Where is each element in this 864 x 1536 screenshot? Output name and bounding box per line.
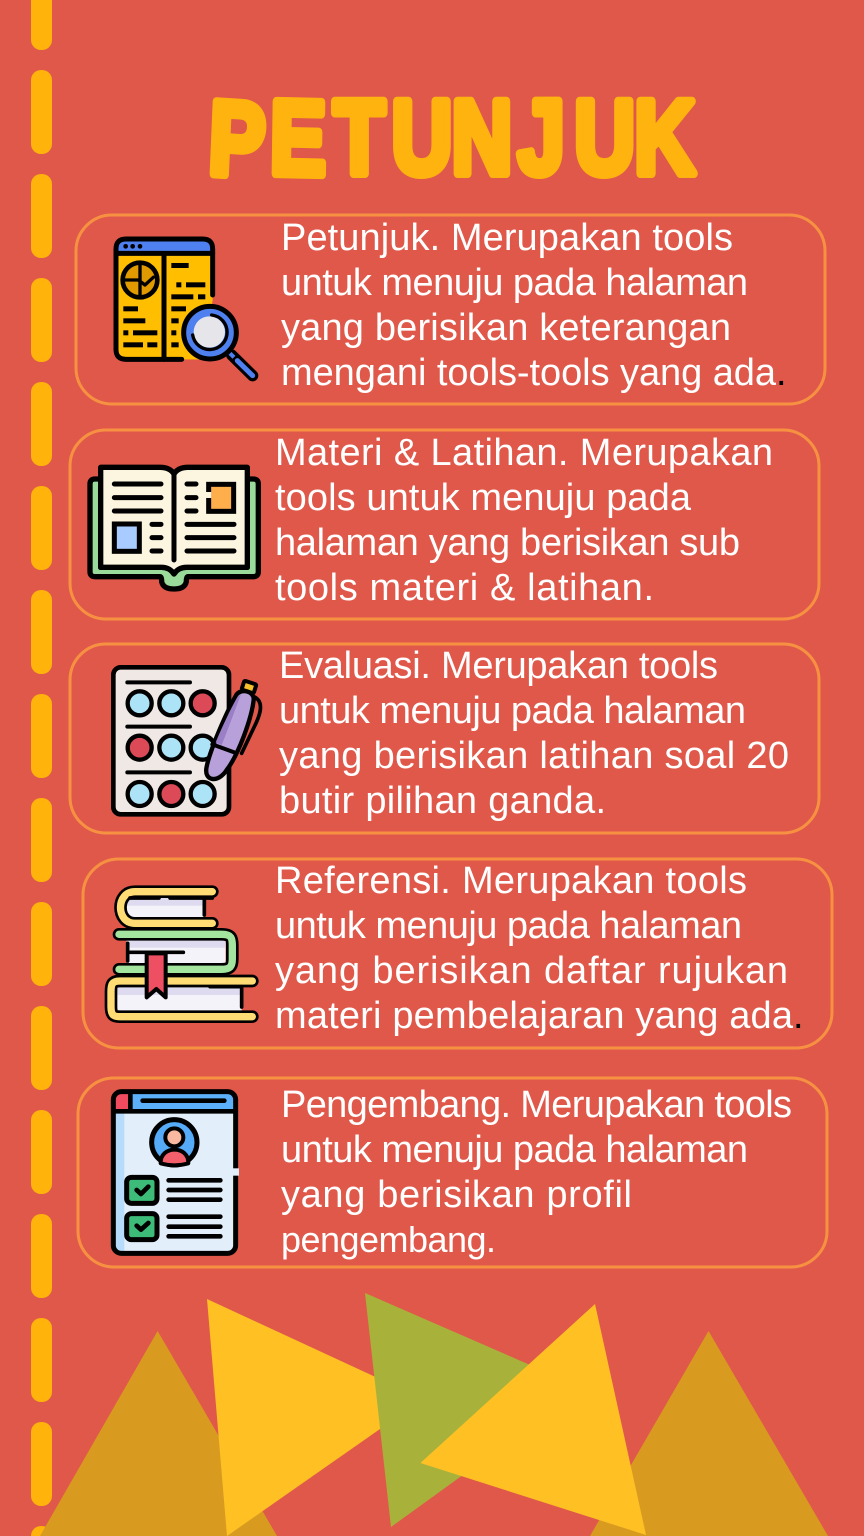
title: PETUNJUK xyxy=(207,80,695,200)
text: Pengembang description: pengembang. xyxy=(281,1219,496,1260)
text: Pengembang description: untuk menuju pada halaman xyxy=(281,1129,748,1171)
icon: stack of books xyxy=(111,892,252,1017)
text: Petunjuk description: Petunjuk. Merupakan tools xyxy=(281,217,733,259)
panel: Referensi xyxy=(83,859,832,1048)
panel: Evaluasi xyxy=(70,644,819,833)
panel border xyxy=(70,430,819,619)
icon: document with magnifying glass xyxy=(116,239,253,376)
panel border xyxy=(70,644,819,833)
panel border xyxy=(78,1078,827,1267)
text: Petunjuk description: yang berisikan keterangan xyxy=(281,307,731,349)
text: Petunjuk description: . xyxy=(776,352,787,394)
icon: open book xyxy=(90,467,258,589)
text: Petunjuk description xyxy=(281,217,787,394)
text: Referensi description: yang berisikan daftar rujukan xyxy=(275,950,788,992)
text: Evaluasi description: untuk menuju pada halaman xyxy=(279,690,746,732)
text: Materi & Latihan description: tools untuk menuju pada xyxy=(275,477,692,519)
text: Referensi description: Referensi. Merupakan tools xyxy=(275,860,747,902)
text: Evaluasi description: butir pilihan ganda. xyxy=(279,780,606,822)
text: Pengembang description: yang berisikan profil xyxy=(281,1174,632,1216)
text: Referensi description: materi pembelajaran yang ada xyxy=(275,995,794,1037)
text: Petunjuk description: mengani tools-tools yang ada xyxy=(281,352,777,394)
text: Referensi description xyxy=(275,860,804,1037)
panel: Pengembang xyxy=(78,1078,827,1267)
text: Petunjuk description: untuk menuju pada halaman xyxy=(281,262,748,304)
dashed vertical line xyxy=(31,0,52,1536)
panel: Materi & Latihan xyxy=(70,430,819,619)
icon: profile document xyxy=(113,1092,239,1253)
text: Materi & Latihan description: halaman yang berisikan sub xyxy=(275,522,740,564)
panel: Petunjuk xyxy=(76,215,825,404)
text: Evaluasi description: Evaluasi. Merupakan tools xyxy=(279,645,718,687)
text: Evaluasi description: yang berisikan latihan soal 20 xyxy=(279,735,789,777)
panel border xyxy=(76,215,825,404)
text: Materi & Latihan description: tools materi & latihan. xyxy=(275,567,654,609)
text: Materi & Latihan description: Materi & Latihan. Merupakan xyxy=(275,432,773,474)
text: Evaluasi description xyxy=(279,645,789,822)
decorative triangles xyxy=(40,1293,828,1536)
icon: answer sheet with pen xyxy=(113,667,260,814)
text: Referensi description: untuk menuju pada halaman xyxy=(275,905,742,947)
text: Pengembang description: Pengembang. Merupakan tools xyxy=(281,1084,792,1126)
text: Referensi description: . xyxy=(793,995,804,1037)
text: Materi & Latihan description xyxy=(275,432,773,609)
panel border xyxy=(83,859,832,1048)
text: Pengembang description xyxy=(281,1084,792,1260)
